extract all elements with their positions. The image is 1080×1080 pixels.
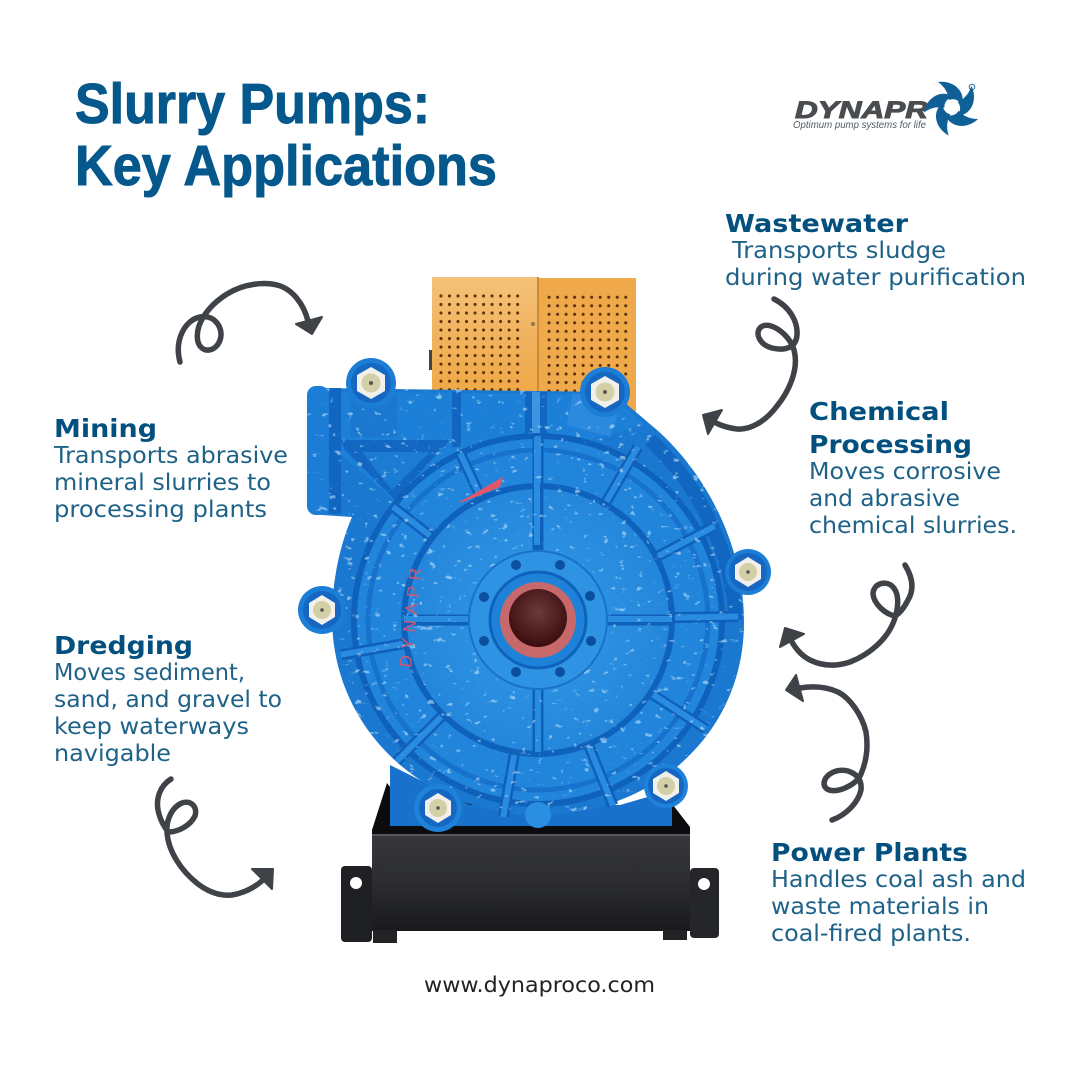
text block: mining: Mining [54,414,157,443]
text block: wastewater: Wastewater [725,209,909,238]
logo: Dynapro: Optimum pump systems for life [793,119,926,131]
text block: chemical processing: and abrasive [809,484,960,512]
text block: chemical processing: Processing [809,430,972,459]
pump: ribbed cover [300,380,750,820]
arrow: chemical processing to pump [780,565,912,665]
text block: wastewater: Transports sludge [731,236,946,264]
pump: casing bolts [298,358,771,832]
pump: base frame [341,783,719,943]
title [75,72,497,198]
text block: dredging: sand, and gravel to [54,685,282,713]
arrow: dredging to pump [158,779,273,895]
infographic canvas [54,82,1024,996]
pump: control box [429,277,636,428]
pump: cast brand lettering: DYNAPR [396,567,425,668]
title: Key Applications [75,134,497,198]
pump: red arrow mark [458,477,503,503]
text block: mining: Transports abrasive [53,441,288,469]
text block: wastewater: during water purification [725,263,1026,291]
arrow: wastewater to pump [703,299,797,434]
text block: mining: processing plants [54,495,267,523]
text block: power plants: waste materials in [771,892,989,920]
pump: blue pedestal [390,765,672,826]
text block: chemical processing: Moves corrosive [809,457,1001,485]
website url: www.dynaproco.com [424,973,655,997]
text block: power plants [771,838,1026,947]
text block: chemical processing: Chemical [809,397,949,426]
arrow: mining to pump [178,284,322,362]
arrow: power plants to pump [786,675,867,820]
pump: volute casing [307,386,744,815]
text block: mining: mineral slurries to [54,468,271,496]
title: Slurry Pumps: [75,72,430,136]
pump: central hub and bore [469,551,607,689]
drain plug [525,802,551,828]
logo: Dynapro: DYNAPR [795,97,929,124]
text block: power plants: coal-fired plants. [771,919,971,947]
text block: dredging: navigable [54,739,171,767]
logo: Dynapro [793,82,979,136]
text block: chemical processing [809,397,1017,539]
text block: wastewater [725,209,1026,291]
text block: power plants: Power Plants [771,838,968,867]
text block: dredging: Dredging [54,631,193,660]
text block: dredging: keep waterways [54,712,249,740]
text block: dredging [54,631,282,767]
text block: mining [53,414,288,523]
text block: dredging: Moves sediment, [54,658,245,686]
text block: power plants: Handles coal ash and [771,865,1026,893]
text block: chemical processing: chemical slurries. [809,511,1017,539]
